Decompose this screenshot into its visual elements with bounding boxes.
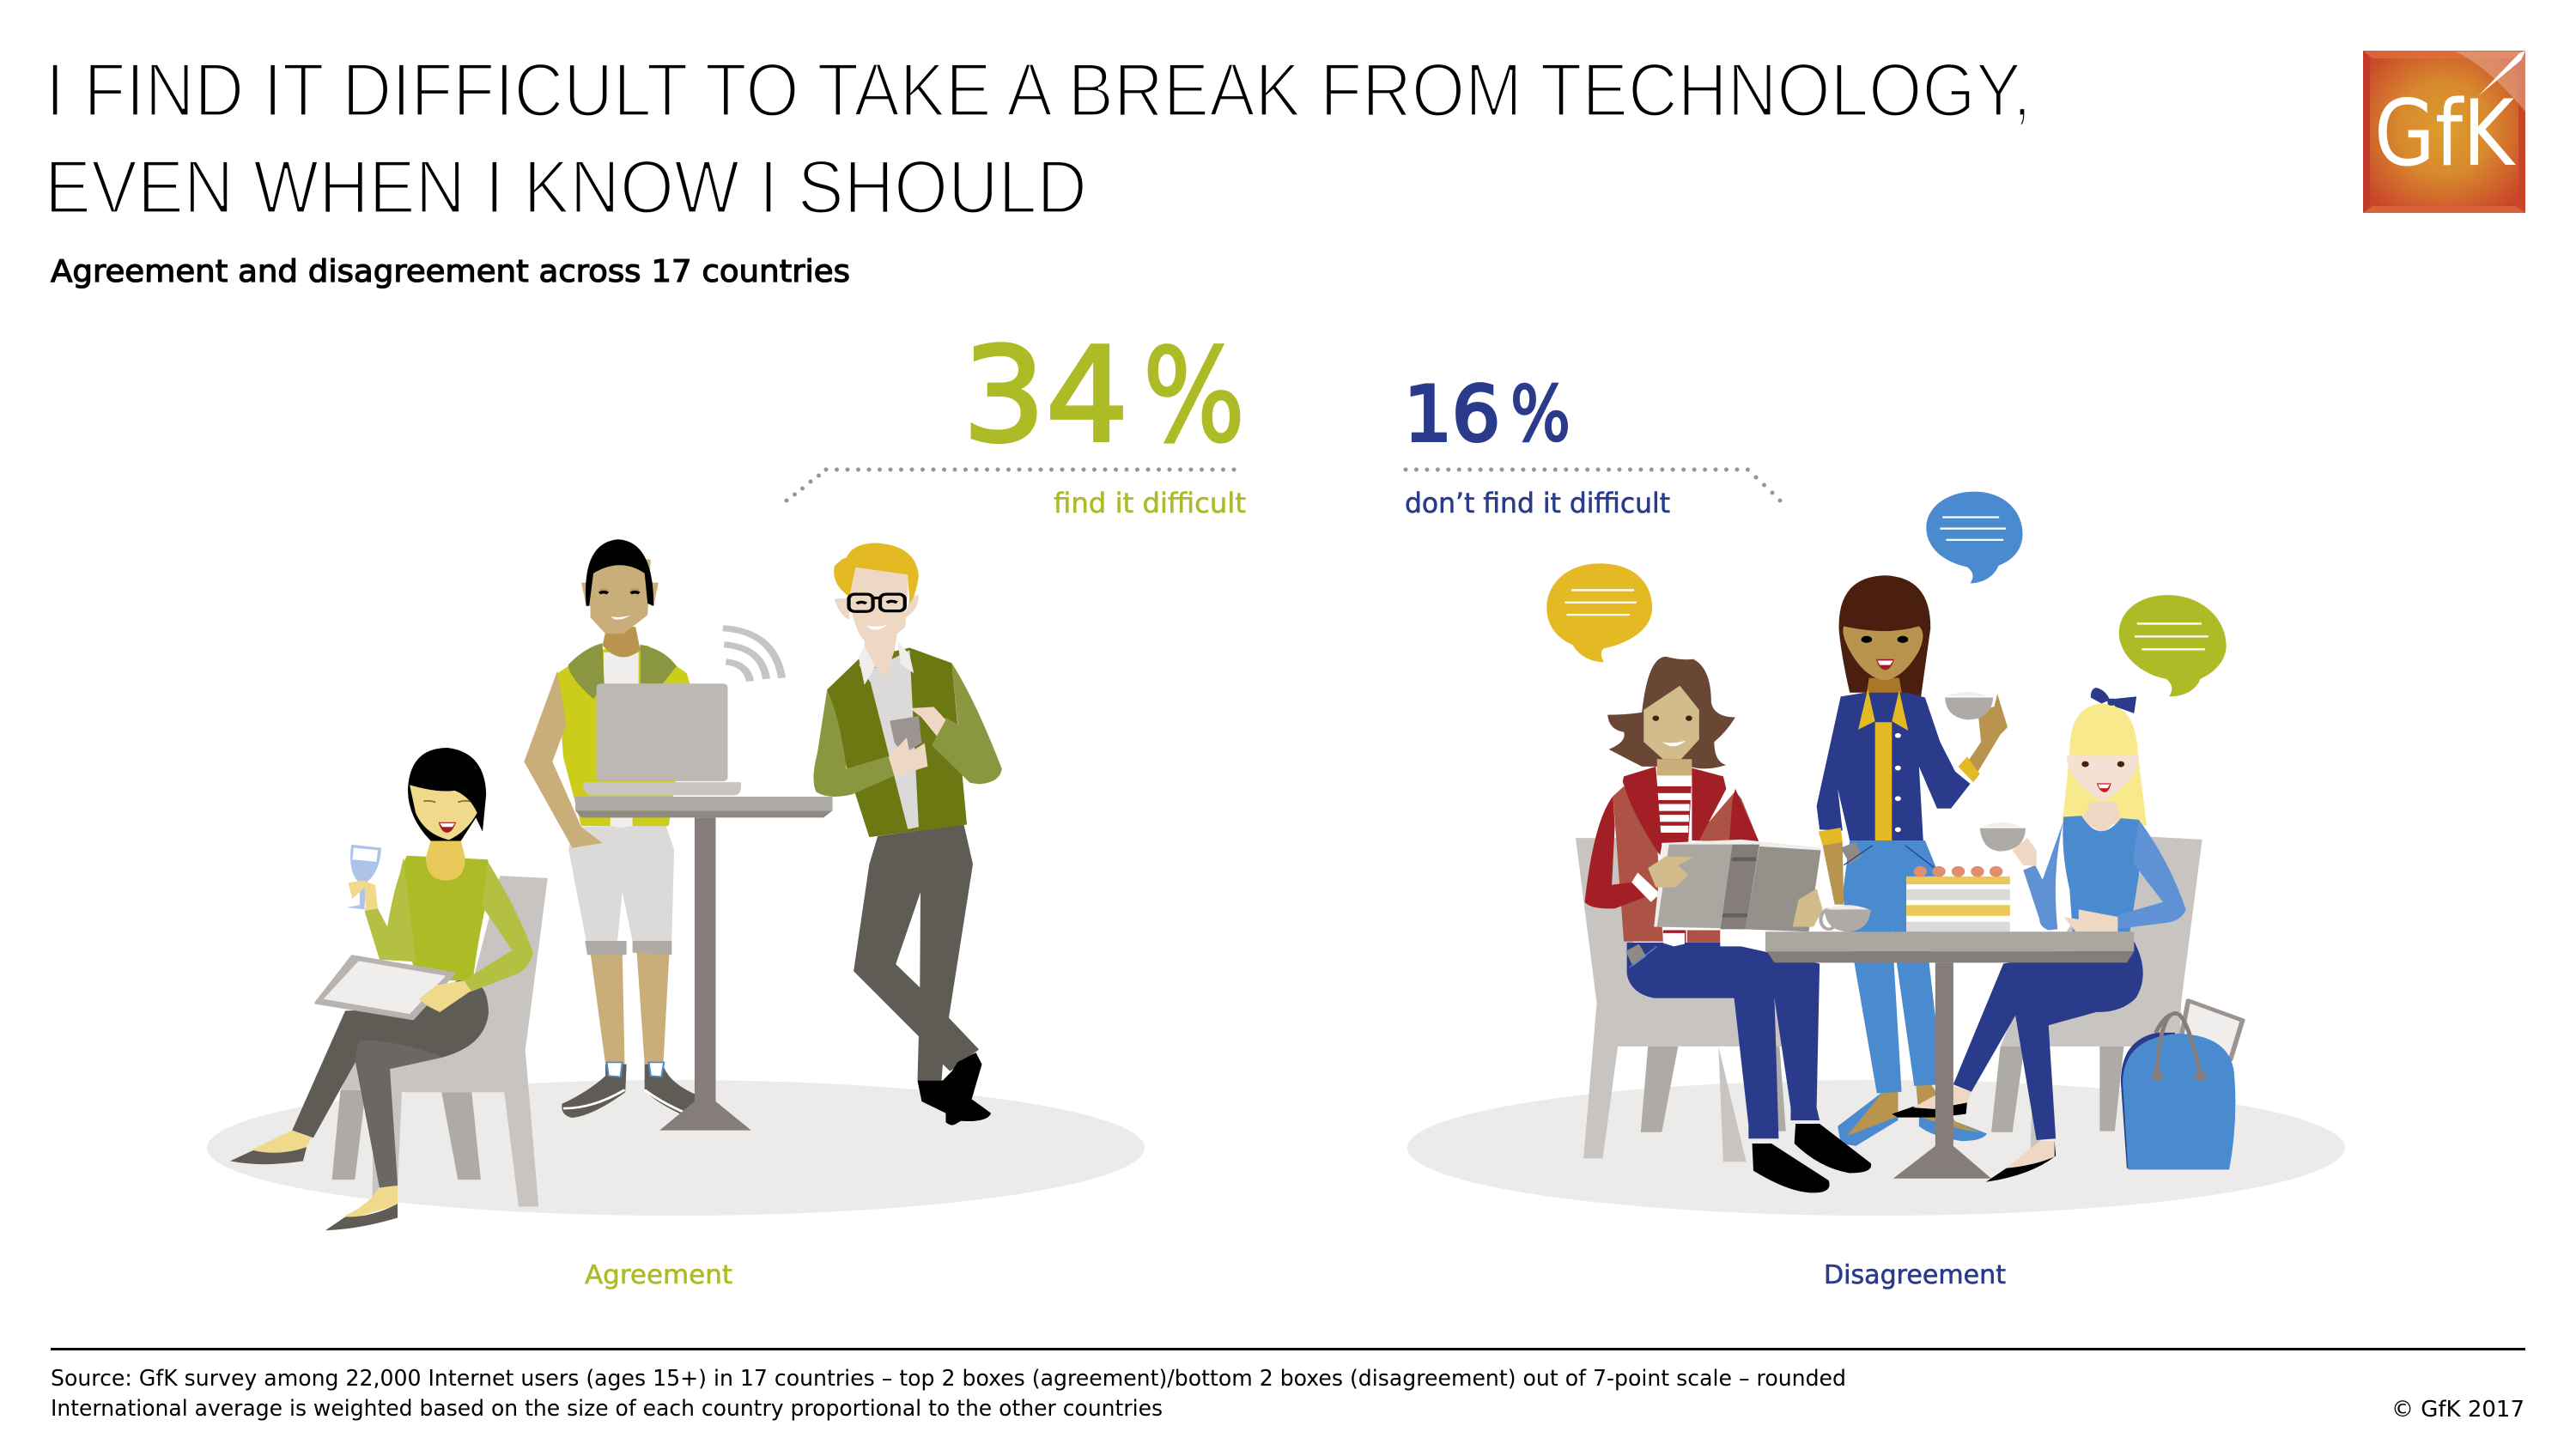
label: agreement: Agreement	[585, 1260, 732, 1290]
seated woman with bow	[1892, 688, 2186, 1182]
stat: 34% find it difficult	[785, 319, 1246, 519]
title: EVEN WHEN I KNOW I SHOULD	[45, 144, 1087, 229]
illustration: disagreement group	[1546, 492, 2243, 1192]
stat: 34% find it difficult: %	[1143, 322, 1245, 471]
standing woman with cup	[1817, 575, 2008, 1146]
floor ellipse left	[207, 1080, 1145, 1216]
seated woman with book	[1585, 657, 1871, 1192]
stat: 16% don't find it difficult: 16	[1404, 370, 1500, 458]
coffee cup on table	[1821, 905, 1871, 931]
speech bubble green	[2119, 595, 2227, 696]
shopping bag with tablet	[2121, 1001, 2243, 1169]
source note: International average is weighted based on the size of each country proportional to the other countries	[51, 1396, 1163, 1422]
cafe table	[1765, 931, 2134, 1179]
floor ellipse right	[1407, 1080, 2345, 1216]
title: I FIND IT DIFFICULT TO TAKE A BREAK FROM TECHNOLOGY,	[46, 47, 2032, 132]
dotted bracket right	[1406, 470, 1783, 503]
standing man with glasses and phone	[813, 543, 1002, 1125]
seated woman with tablet	[230, 748, 548, 1230]
standing table	[575, 797, 833, 1131]
illustration: agreement group	[230, 539, 1002, 1230]
stat: 16% don't find it difficult: %	[1510, 370, 1571, 458]
stat: 34% find it difficult: 34	[963, 319, 1128, 471]
standing man with laptop	[524, 539, 696, 1118]
logo: GfK	[2363, 51, 2525, 213]
subtitle: Agreement and disagreement across 17 countries	[51, 254, 850, 289]
logo: GfK: GfK	[2374, 81, 2516, 186]
title	[45, 47, 2032, 229]
laptop	[583, 683, 741, 795]
speech bubble yellow	[1546, 563, 1652, 662]
cake	[1906, 866, 2010, 931]
dotted bracket left	[785, 470, 1244, 503]
source note: Source: GfK survey among 22,000 Internet users (ages 15+) in 17 countries – top 2 boxes (agreement)/bottom 2 boxes (disagreement) out of 7-point scale – rounded	[51, 1366, 1846, 1392]
chairs	[1576, 835, 2202, 1162]
stat: 16% don't find it difficult	[1404, 370, 1783, 519]
stat: 16% don't find it difficult: don’t find it difficult	[1405, 487, 1670, 519]
wifi signal icon	[723, 628, 782, 682]
speech bubble blue	[1926, 492, 2023, 583]
label: disagreement: Disagreement	[1824, 1260, 2006, 1290]
source note	[51, 1366, 1846, 1422]
copyright: © GfK 2017	[2391, 1397, 2524, 1423]
stat: 34% find it difficult: find it difficult	[1054, 487, 1246, 519]
